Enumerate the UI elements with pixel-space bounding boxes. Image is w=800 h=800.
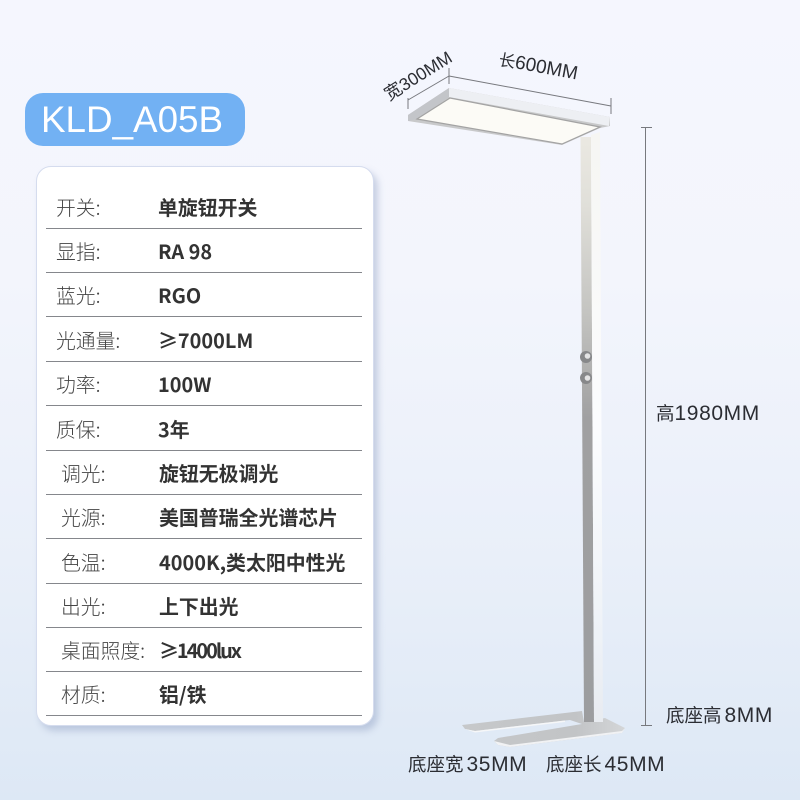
label: base length: 底座长45MM xyxy=(546,753,665,776)
icon: control knobs xyxy=(580,351,592,384)
row: light source xyxy=(46,494,362,539)
row: dimming: 旋钮无极调光 xyxy=(159,458,278,487)
row: warranty: 3年 xyxy=(158,414,190,443)
label: width: 宽300MM xyxy=(381,47,456,104)
icon: lamp pole xyxy=(580,132,603,722)
row: switch: 开关: xyxy=(56,192,101,221)
row: colour temperature xyxy=(46,539,362,584)
label: length: 长600MM xyxy=(497,49,579,84)
row: light output xyxy=(46,583,362,628)
row: blue light xyxy=(46,272,362,317)
row: light source: 光源: xyxy=(61,502,106,531)
row: warranty xyxy=(46,406,362,451)
icon: lamp head xyxy=(408,88,610,145)
dimension: width line xyxy=(408,68,449,109)
label: height: 高1980MM xyxy=(656,402,760,425)
row: dimming xyxy=(46,450,362,495)
label: base width: 底座宽35MM xyxy=(408,753,527,776)
row: desk illuminance: ≥1400lux xyxy=(159,635,240,664)
row: power xyxy=(46,361,362,406)
row: power: 100W xyxy=(158,369,211,398)
row: desk illuminance: 桌面照度: xyxy=(61,635,145,664)
row: blue light: RGO xyxy=(158,280,201,309)
row: luminous flux xyxy=(46,317,362,362)
row: material xyxy=(46,671,362,716)
row: colour rendering xyxy=(46,228,362,273)
row: power: 功率: xyxy=(56,369,101,398)
dimension: height line xyxy=(641,127,652,726)
row: colour temperature: 4000K,类太阳中性光 xyxy=(159,547,345,576)
row: material: 铝/铁 xyxy=(159,679,206,708)
title: model badge: KLD_A05B xyxy=(41,99,223,140)
row: switch xyxy=(46,184,362,229)
title: model badge xyxy=(25,93,245,146)
row: light output: 出光: xyxy=(61,591,106,620)
row: light source: 美国普瑞全光谱芯片 xyxy=(159,502,338,531)
row: colour rendering: RA 98 xyxy=(158,236,212,265)
row: light output: 上下出光 xyxy=(159,591,239,620)
row: warranty: 质保: xyxy=(56,414,101,443)
row: blue light: 蓝光: xyxy=(56,280,101,309)
row: material: 材质: xyxy=(61,679,106,708)
row: dimming: 调光: xyxy=(61,458,106,487)
dimension: length line xyxy=(449,76,611,114)
label: base height: 底座高8MM xyxy=(666,704,773,727)
row: switch: 单旋钮开关 xyxy=(158,192,257,221)
icon: lamp base xyxy=(462,711,625,747)
row: luminous flux: ≥7000LM xyxy=(158,325,253,354)
panel: specification table xyxy=(36,166,374,726)
row: desk illuminance xyxy=(46,627,362,672)
row: colour temperature: 色温: xyxy=(61,547,106,576)
row: luminous flux: 光通量: xyxy=(56,325,120,354)
row: colour rendering: 显指: xyxy=(56,236,101,265)
